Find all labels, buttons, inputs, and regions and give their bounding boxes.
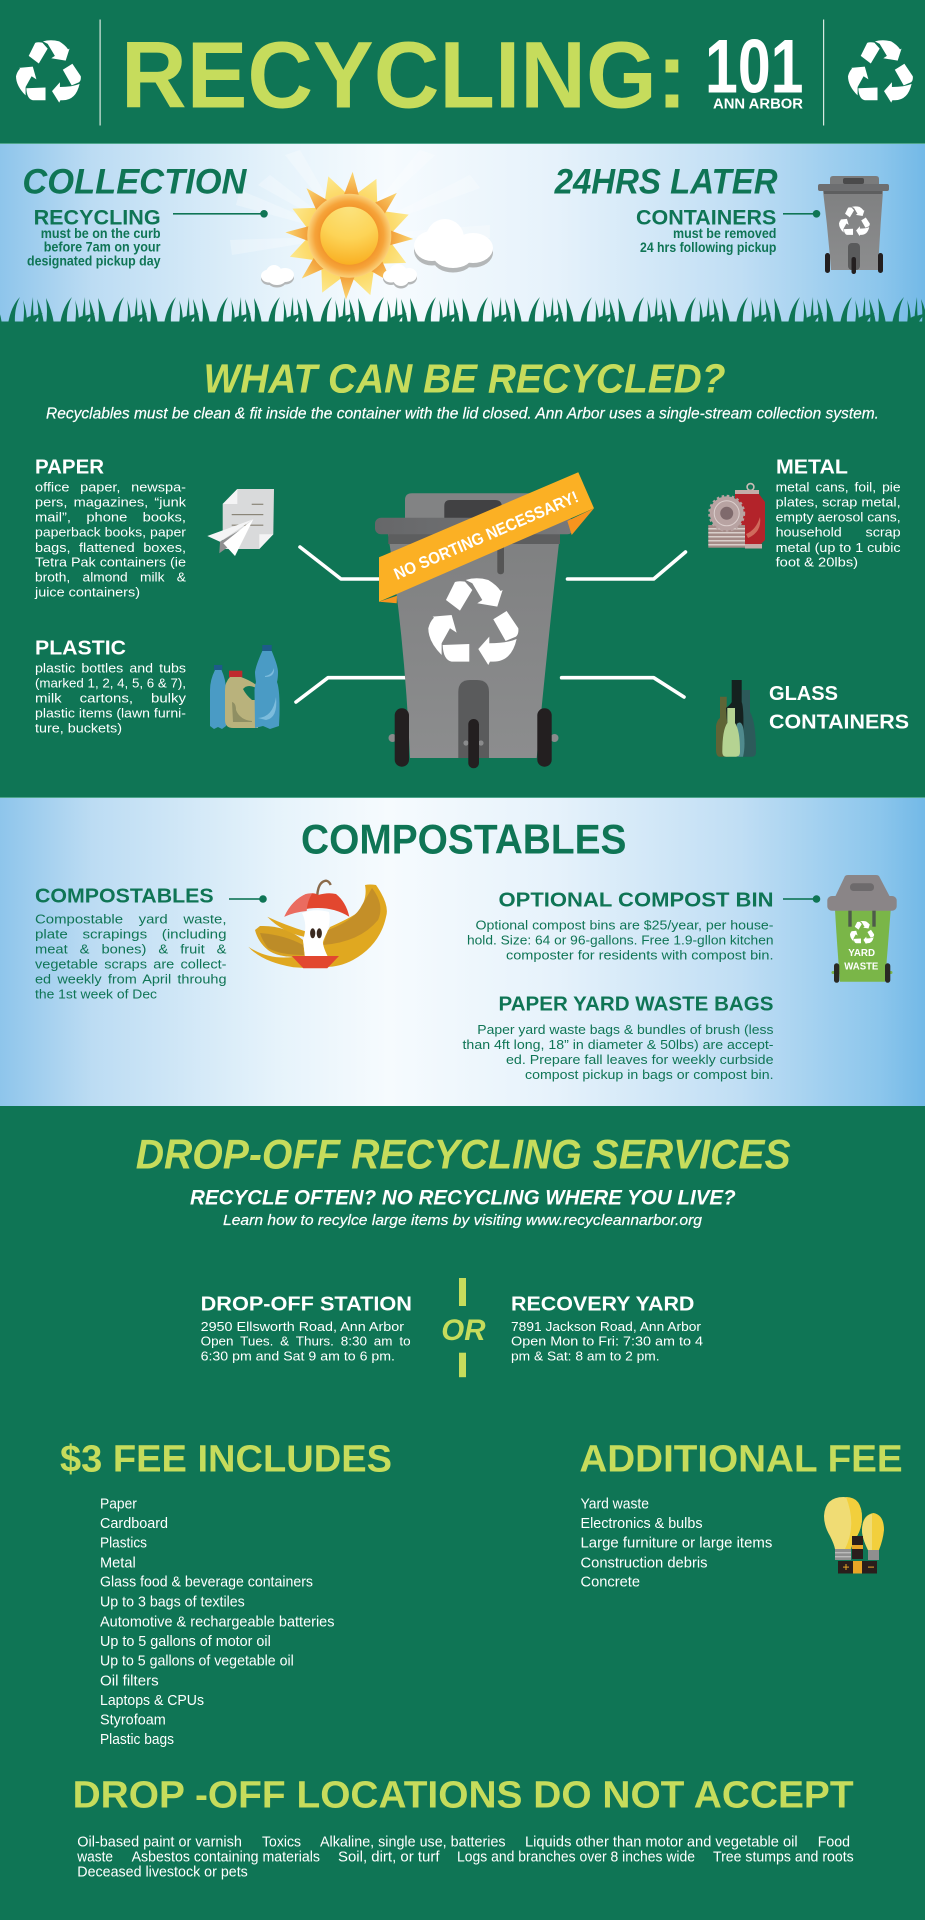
title: RECYCLING:: [121, 23, 687, 129]
list: $3 fee items: Glass food & beverage containers: [100, 1575, 313, 1591]
text block: plastic: [35, 637, 187, 735]
subtitle: 101 Ann Arbor: 101: [705, 25, 804, 110]
or divider: OR: [441, 1314, 486, 1347]
grass strip: [0, 294, 925, 324]
text block: plastic: ture, buckets): [35, 720, 122, 735]
text block: not accepted items: Logs and branches over 8 inches wide: [457, 1850, 695, 1866]
text block: compostables: COMPOSTABLES: [35, 886, 214, 908]
list: additional fee items: Electronics & bulbs: [580, 1516, 702, 1532]
text block: paper: PAPER: [35, 456, 105, 478]
text block: not accepted items: Asbestos containing materials: [132, 1850, 320, 1866]
list: $3 fee items: Up to 3 bags of textiles: [100, 1595, 245, 1611]
text block: paper yard waste bags: compost pickup in bags or compost bin.: [525, 1067, 774, 1082]
intro text: Recyclables must be clean & fit inside the container with the lid closed. Ann Arbor uses a single-stream collection system.: [46, 406, 879, 423]
text block: optional compost bin: OPTIONAL COMPOST BIN: [498, 889, 774, 912]
text block: collection: [22, 162, 247, 268]
text block: compostables: vegetable scraps are collect-: [35, 956, 226, 971]
text block: recovery yard: Open Mon to Fri: 7:30 am to 4: [511, 1334, 703, 1349]
list: additional fee items: Construction debris: [580, 1555, 708, 1571]
text block: paper: mail”, phone books,: [35, 510, 186, 525]
text block: recovery yard: 7891 Jackson Road, Ann Arbor: [511, 1319, 702, 1334]
text block: collection: must be on the curb: [41, 226, 161, 241]
text block: not accepted items: [76, 1835, 854, 1881]
text block: compostables: the 1st week of Dec: [35, 986, 158, 1001]
header divider left: [100, 20, 101, 126]
website note: Learn how to recylce large items by visiting www.recycleannarbor.org: [223, 1212, 703, 1229]
subheading: RECYCLE OFTEN? NO RECYCLING WHERE YOU LIVE?: [190, 1186, 736, 1209]
icon: recycling symbol left: [16, 40, 81, 103]
pointer: collection: [173, 210, 268, 218]
text block: not accepted items: Toxics: [262, 1835, 301, 1851]
pointer: containers: [783, 210, 820, 218]
text block: collection: RECYCLING: [34, 205, 161, 229]
text block: plastic: (marked 1, 2, 4, 5, 6 & 7),: [35, 675, 186, 690]
icon: green compost bin: WASTE: [844, 960, 878, 972]
icon: green compost bin: [827, 875, 897, 983]
text block: 24hrs later: CONTAINERS: [636, 205, 776, 229]
text block: collection: before 7am on your: [44, 240, 161, 255]
header divider right: [823, 20, 824, 126]
text block: metal: plates, scrap metal,: [776, 495, 901, 510]
text block: not accepted items: Deceased livestock or pets: [77, 1865, 248, 1881]
text block: plastic: plastic items (lawn furni-: [35, 705, 186, 720]
pointer: compostables: [229, 895, 267, 903]
list: additional fee items: Large furniture or large items: [580, 1536, 772, 1552]
sun rays background: [230, 150, 490, 255]
heading: $3 fee includes: $3 FEE INCLUDES: [60, 1439, 392, 1481]
icon: small cloud right: [383, 264, 417, 288]
wheels: [395, 708, 409, 767]
text block: paper: Tetra Pak containers (ie: [35, 555, 186, 570]
text block: paper: pers, magazines, “junk: [35, 495, 187, 510]
text block: paper yard waste bags: Paper yard waste bags & bundles of brush (less: [477, 1022, 774, 1037]
text block: drop-off station: [201, 1293, 412, 1364]
banner: no sorting necessary: NO SORTING NECESSARY!: [391, 488, 581, 584]
recycling symbol on bin: [428, 578, 518, 665]
list: $3 fee items: Up to 5 gallons of motor oil: [100, 1634, 271, 1650]
text block: collection: designated pickup day: [27, 253, 161, 268]
list: $3 fee items: Laptops & CPUs: [100, 1693, 204, 1709]
pointer: compost bin: [783, 895, 820, 903]
text block: recovery yard: [511, 1293, 703, 1364]
text block: paper yard waste bags: ed. Prepare fall leaves for weekly curbside: [506, 1052, 774, 1067]
text block: drop-off station: Open Tues. & Thurs. 8:30 am to: [201, 1334, 411, 1349]
icon: cans: [708, 484, 765, 548]
panel: collection sky band: [0, 143, 925, 324]
text block: compostables: meat & bones) & fruit &: [35, 941, 227, 956]
icon: small grey bin: [818, 176, 889, 274]
heading: additional fee: ADDITIONAL FEE: [579, 1439, 903, 1481]
text block: not accepted items: Oil-based paint or varnish: [77, 1835, 242, 1851]
list: $3 fee items: Styrofoam: [100, 1713, 166, 1729]
text block: 24hrs later: 24HRS LATER: [554, 162, 778, 201]
icon: recycling symbol right: [848, 40, 913, 103]
icon: apple core and banana peel: [248, 881, 387, 968]
text block: plastic: plastic bottles and tubs: [35, 660, 187, 675]
icon: green compost bin: YARD: [848, 947, 875, 959]
list: $3 fee items: Plastics: [100, 1536, 147, 1552]
text block: optional compost bin: hold. Size: 64 or 96-gallons. Free 1.9-gllon kitchen: [467, 932, 774, 947]
text block: drop-off station: 6:30 pm and Sat 9 am to 6 pm.: [201, 1349, 395, 1364]
text block: metal: household scrap: [776, 525, 901, 540]
text block: metal: metal cans, foil, pie: [776, 480, 901, 495]
icon: small cloud left: [261, 265, 294, 288]
list: additional fee items: Concrete: [580, 1575, 640, 1591]
heading: drop-off recycling services: DROP-OFF RECYCLING SERVICES: [136, 1130, 791, 1177]
text block: not accepted items: Tree stumps and roots: [713, 1850, 854, 1866]
text block: paper: juice containers): [34, 585, 140, 600]
label: glass containers: [769, 683, 909, 733]
text block: not accepted items: Liquids other than motor and vegetable oil: [525, 1835, 798, 1851]
icon: sun: [285, 171, 414, 300]
text block: drop-off station: 2950 Ellsworth Road, Ann Arbor: [201, 1319, 405, 1334]
list: $3 fee items: Cardboard: [100, 1516, 168, 1532]
list: $3 fee items: Plastic bags: [100, 1732, 174, 1748]
heading: compostables: COMPOSTABLES: [301, 815, 626, 862]
text block: compostables: [35, 886, 227, 1001]
text block: metal: METAL: [776, 456, 848, 478]
text block: paper: [34, 456, 187, 600]
list: $3 fee items: [100, 1496, 334, 1748]
text block: optional compost bin: composter for residents with compost bin.: [506, 947, 774, 962]
text block: drop-off station: DROP-OFF STATION: [201, 1293, 412, 1316]
panel: compostables band: [0, 797, 925, 1106]
text block: collection: COLLECTION: [22, 162, 247, 201]
icon: large cloud: [414, 219, 493, 272]
text block: compostables: ed weekly from April throuhg: [35, 971, 226, 986]
text block: not accepted items: waste: [76, 1850, 113, 1866]
label: glass containers: CONTAINERS: [769, 711, 909, 733]
text block: paper yard waste bags: PAPER YARD WASTE BAGS: [498, 993, 774, 1016]
bin body: [388, 534, 560, 758]
list: additional fee items: [580, 1496, 772, 1591]
text block: 24hrs later: [554, 162, 778, 255]
text block: optional compost bin: [467, 889, 774, 962]
text block: paper: paperback books, paper: [35, 525, 187, 540]
text block: not accepted items: Alkaline, single use, batteries: [320, 1835, 506, 1851]
text block: optional compost bin: Optional compost bins are $25/year, per house-: [476, 917, 774, 932]
text block: plastic: PLASTIC: [35, 637, 126, 659]
list: $3 fee items: Automotive & rechargeable batteries: [100, 1615, 334, 1631]
label: glass containers: GLASS: [769, 683, 838, 705]
text block: metal: metal (up to 1 cubic: [776, 540, 901, 555]
list: $3 fee items: Up to 5 gallons of vegetable oil: [100, 1654, 294, 1670]
list: $3 fee items: Metal: [100, 1555, 136, 1571]
text block: metal: empty aerosol cans,: [776, 510, 901, 525]
bin slot: [444, 500, 502, 518]
text block: compostables: Compostable yard waste,: [35, 911, 226, 926]
text block: not accepted items: Food: [818, 1835, 850, 1851]
or divider: [441, 1278, 486, 1377]
heading: drop-off locations do not accept: DROP -OFF LOCATIONS DO NOT ACCEPT: [73, 1774, 854, 1816]
text block: metal: foot & 20lbs): [776, 555, 858, 570]
text block: paper yard waste bags: than 4ft long, 18” in diameter & 50lbs) are accept-: [462, 1037, 774, 1052]
text block: paper: broth, almond milk &: [35, 570, 186, 585]
subtitle: 101 Ann Arbor: ANN ARBOR: [713, 97, 804, 113]
connector lines: [296, 547, 686, 702]
list: $3 fee items: Paper: [100, 1496, 137, 1512]
text block: paper: bags, flattened boxes,: [35, 540, 186, 555]
icon: large recycling bin: [375, 493, 573, 768]
text block: recovery yard: RECOVERY YARD: [511, 1293, 694, 1316]
text block: metal: [776, 456, 901, 570]
text block: recovery yard: pm & Sat: 8 am to 2 pm.: [511, 1349, 660, 1364]
heading: what can be recycled: WHAT CAN BE RECYCLED?: [204, 355, 726, 401]
icon: glass bottles: [716, 680, 756, 757]
icon: plastic bottles: [210, 645, 280, 729]
list: $3 fee items: Oil filters: [100, 1673, 159, 1689]
text block: plastic: milk cartons, bulky: [35, 691, 187, 706]
text block: 24hrs later: 24 hrs following pickup: [640, 240, 776, 255]
header band: [16, 20, 913, 129]
icon: paper and paper plane: [207, 489, 274, 556]
text block: compostables: plate scrapings (including: [35, 926, 226, 941]
text block: paper yard waste bags: [462, 993, 774, 1082]
text block: 24hrs later: must be removed: [673, 226, 776, 241]
list: additional fee items: Yard waste: [580, 1496, 649, 1512]
text block: paper: office paper, newspa-: [35, 480, 186, 495]
icon: bulbs and batteries: [824, 1497, 884, 1574]
text block: not accepted items: Soil, dirt, or turf: [338, 1850, 440, 1866]
